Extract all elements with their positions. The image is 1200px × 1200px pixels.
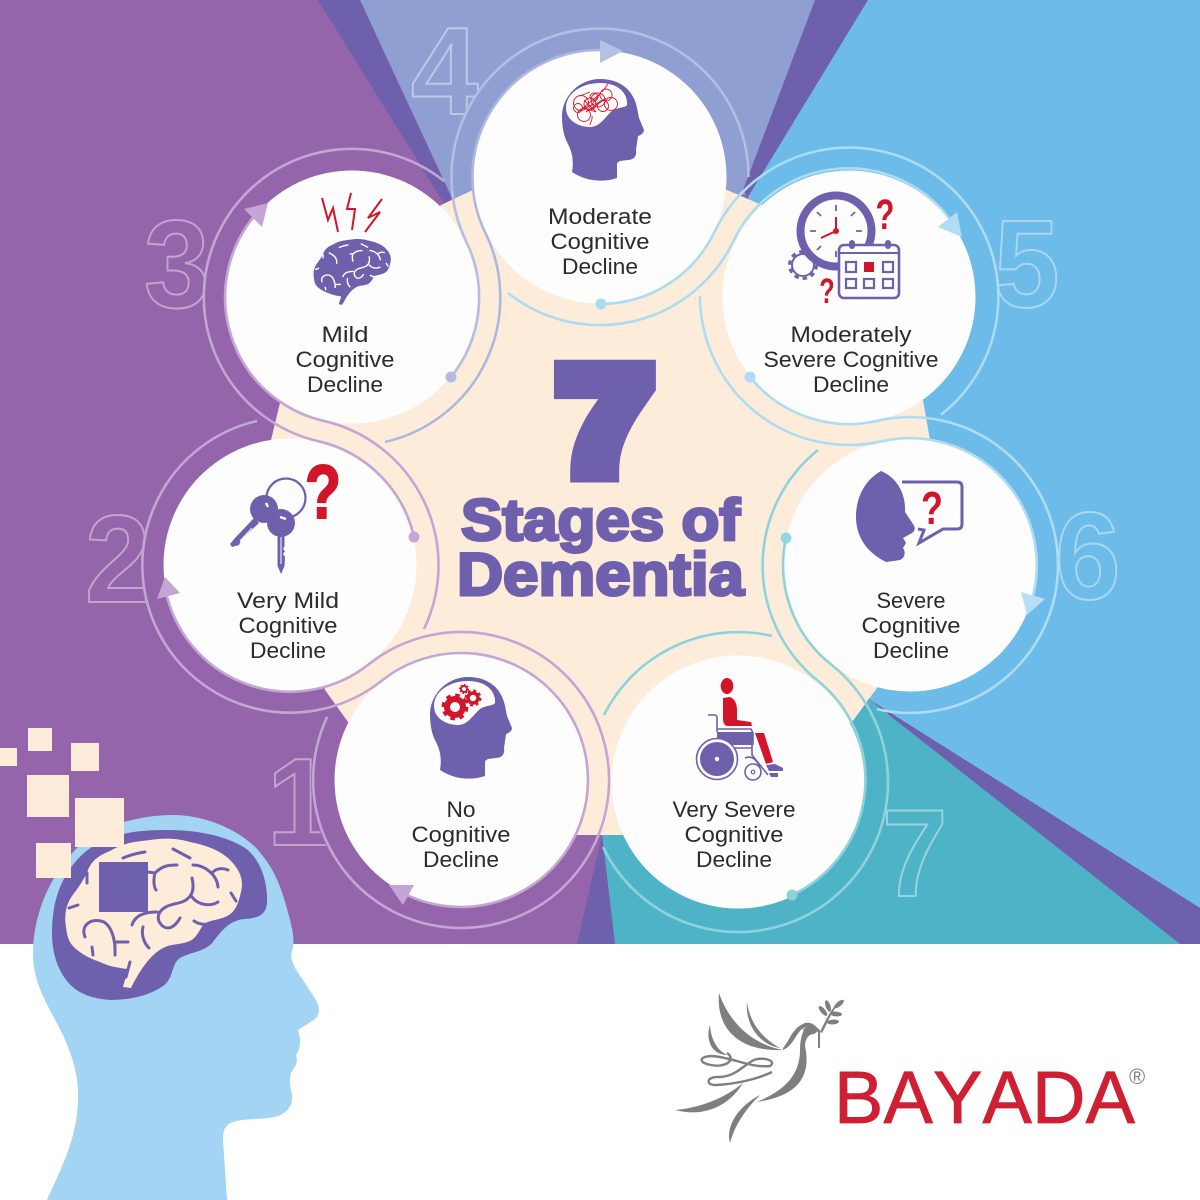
label: Moderate	[548, 204, 652, 229]
arrowheads	[157, 40, 1045, 905]
label: Cognitive	[862, 613, 960, 638]
connecting ring lines	[142, 29, 1058, 932]
outlined stage numbers: 1	[267, 733, 333, 872]
outlined stage numbers: 7	[882, 784, 948, 923]
label	[764, 322, 938, 397]
label: Decline	[423, 847, 499, 872]
label: Decline	[562, 254, 638, 279]
label	[237, 588, 339, 663]
icon: dove	[675, 993, 845, 1143]
label: Cognitive	[550, 229, 650, 254]
icon: clock, calendar and question marks: ?	[876, 190, 894, 238]
illustration: large head with fading brain	[0, 728, 319, 1200]
label: Decline	[696, 847, 772, 872]
label: Severe Cognitive	[764, 347, 938, 372]
title: 7	[560, 340, 650, 502]
wordmark: BAYADA	[834, 1056, 1136, 1139]
label: Cognitive	[412, 822, 510, 847]
icon: face with speech bubble	[856, 471, 962, 562]
title: Dementia	[457, 541, 745, 608]
outlined stage numbers	[85, 3, 1121, 923]
ring dots	[408, 298, 798, 900]
label	[296, 322, 394, 397]
logo: BAYADA dove and wordmark	[675, 993, 1145, 1143]
label: Moderately	[790, 322, 912, 347]
label: Cognitive	[684, 822, 784, 847]
center cream panel	[271, 190, 930, 835]
label: Cognitive	[238, 613, 338, 638]
label: Decline	[873, 638, 949, 663]
registered mark: ®	[1129, 1064, 1145, 1089]
outlined stage numbers: 2	[85, 490, 151, 629]
title: Stages of	[461, 488, 741, 553]
label: Cognitive	[296, 347, 394, 372]
outlined stage numbers: 4	[411, 3, 479, 141]
label	[672, 797, 796, 872]
label: Very Severe	[672, 797, 796, 822]
outlined stage numbers: 3	[144, 195, 210, 334]
outlined stage numbers: 5	[994, 195, 1060, 334]
label	[548, 204, 652, 279]
label: Very Mild	[237, 588, 339, 613]
icon: clock, calendar and question marks	[790, 190, 899, 311]
stage 7: very severe cognitive decline	[672, 678, 796, 872]
white stage circles	[164, 50, 1036, 908]
outlined stage numbers: 6	[1055, 487, 1121, 626]
icon: face with speech bubble: ?	[921, 483, 943, 534]
stage 5: moderately severe cognitive decline	[764, 190, 938, 397]
label: Decline	[307, 372, 383, 397]
label	[412, 797, 510, 872]
title	[457, 340, 745, 608]
stage 1: no cognitive decline	[412, 677, 512, 872]
icon: keys and question mark: ?	[305, 450, 341, 535]
label: Decline	[250, 638, 326, 663]
label: Severe	[876, 588, 946, 613]
icon: person in wheelchair	[696, 678, 783, 780]
icon: head with gears	[430, 677, 512, 779]
label	[862, 588, 960, 663]
stage 6: severe cognitive decline	[856, 471, 962, 663]
icon: clock, calendar and question marks: ?	[819, 272, 835, 311]
icon: keys and question mark	[230, 450, 341, 574]
stage 4: moderate cognitive decline	[548, 79, 652, 279]
label: No	[446, 797, 476, 822]
label: Mild	[322, 322, 368, 347]
label: Decline	[813, 372, 889, 397]
icon: brain with lightning bolts	[314, 193, 391, 305]
stage 2: very mild cognitive decline	[230, 450, 341, 663]
icon: head with tangled brain	[562, 79, 644, 181]
stage 3: mild cognitive decline	[296, 193, 394, 397]
